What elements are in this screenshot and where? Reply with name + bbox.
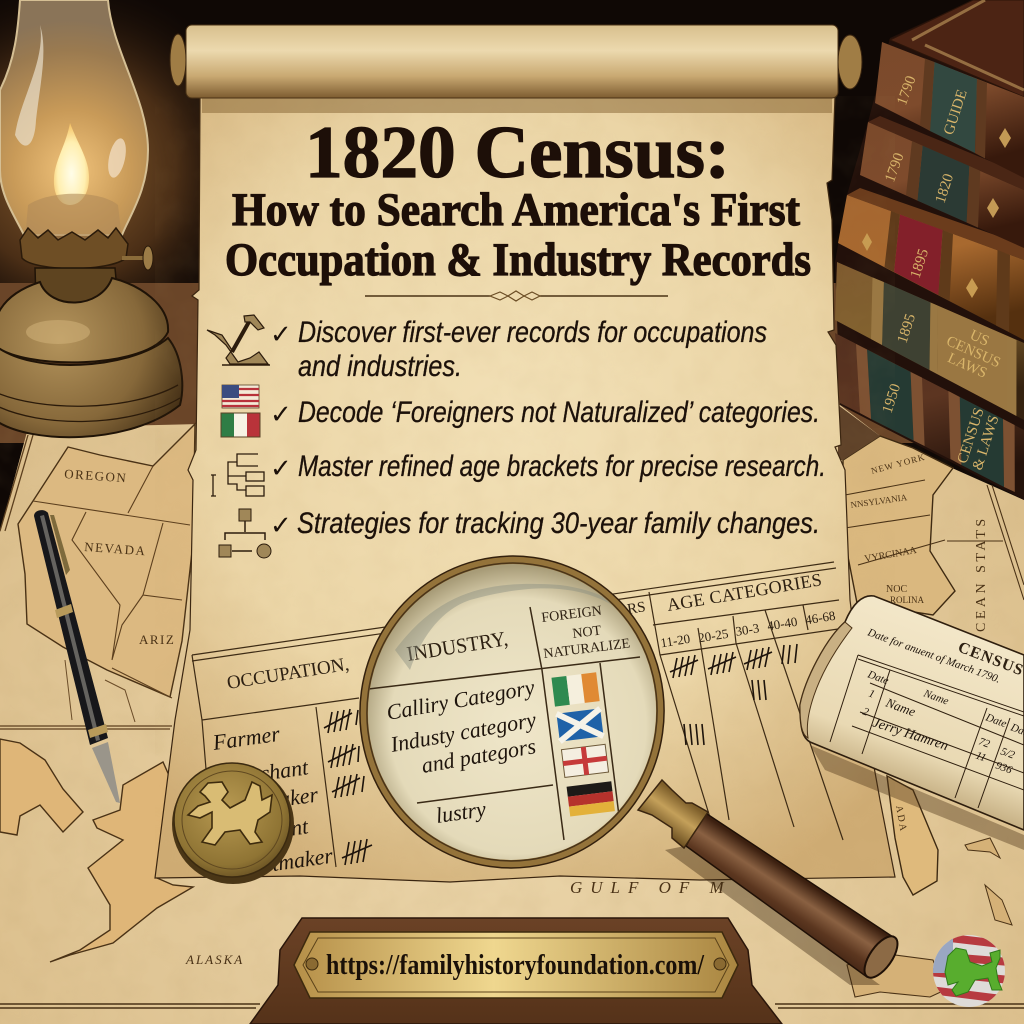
table header: occupation: OCCUPATION, <box>225 654 351 694</box>
map river lines <box>65 660 135 722</box>
bullet 2: Decode ‘Foreigners not Naturalized’ categories. <box>298 396 820 429</box>
map florida land <box>887 776 938 895</box>
map west states land <box>18 424 195 697</box>
map state borders <box>33 466 190 698</box>
map labels: ARIZ <box>139 632 175 647</box>
pen <box>34 510 120 803</box>
green lion emblem <box>945 948 1002 996</box>
lens handwriting: Industy category <box>388 707 538 757</box>
age column labels: 46-68 <box>804 608 836 627</box>
bullet 1: ✓ <box>270 320 292 350</box>
title line 1: 1820 Census: <box>305 112 730 194</box>
map labels: ROLINA <box>890 595 924 605</box>
rim outline <box>340 536 684 888</box>
title line 3: Occupation & Industry Records <box>225 234 811 286</box>
rim highlight <box>348 544 676 880</box>
map texture <box>0 428 1024 1024</box>
title divider ornament <box>365 291 668 301</box>
sheet entries: 936 <box>994 760 1014 777</box>
wick knob <box>122 246 153 270</box>
map bahama islands <box>965 838 1012 925</box>
occupation handwriting: Shoemaker <box>219 782 320 820</box>
book 5: 1950 <box>880 382 904 415</box>
occupation handwriting: Merchant <box>221 754 310 791</box>
spine title US Census Laws <box>938 320 1009 385</box>
lens handwriting: and pategors <box>420 733 538 778</box>
lens <box>347 543 677 881</box>
sheet entries: 5/2 <box>999 746 1017 762</box>
bullet 4: ✓ <box>270 511 292 541</box>
book 3 <box>838 188 1024 340</box>
lens handwriting: Calliry Category <box>385 674 537 725</box>
map horizontal border <box>0 726 172 729</box>
age column labels: 20-25 <box>697 626 729 645</box>
map caribbean land <box>847 953 945 997</box>
lens glare <box>395 584 628 670</box>
wax seal <box>172 763 294 884</box>
title line 2: How to Search America's First <box>232 184 800 236</box>
bullet 3: Master refined age brackets for precise research. <box>298 450 826 483</box>
sheet entries: Name <box>883 694 918 719</box>
magnifying glass <box>340 536 904 985</box>
scroll paper <box>155 96 895 882</box>
book 5 <box>835 333 1024 497</box>
book 2: 1790 <box>882 151 908 185</box>
sheet shadow <box>810 745 1024 850</box>
parchment scroll <box>155 25 895 882</box>
bullet 3: ✓ <box>270 454 292 484</box>
flag: Ireland <box>551 672 600 707</box>
flag: Scotland <box>556 708 604 742</box>
map labels: GULF OF M <box>570 878 732 897</box>
sheet lines <box>830 655 1024 808</box>
wooden table <box>0 283 1024 443</box>
lens foreigners heading: NATURALIZE <box>543 636 631 662</box>
map bottom border <box>0 1004 1024 1008</box>
title <box>225 112 811 286</box>
map alaska peninsula land <box>50 762 193 962</box>
map labels <box>64 452 989 967</box>
sheet entries: Date <box>983 711 1008 730</box>
gold tool marks <box>862 233 978 298</box>
map east state borders <box>845 480 945 565</box>
book 1: GUIDE <box>941 88 971 137</box>
lens contents <box>360 584 640 840</box>
spine title US Census Laws: LAWS <box>945 350 989 382</box>
icon: flow diagram <box>219 509 271 558</box>
gold tool mark <box>999 128 1011 148</box>
spine title US Census Laws: US <box>967 327 991 350</box>
roll end cap <box>800 622 852 738</box>
upper base highlight <box>26 320 90 344</box>
map labels: NEVADA <box>84 539 147 558</box>
bullet 1: Discover first-ever records for occupations <box>298 316 767 349</box>
spine title US Census Laws: CENSUS <box>944 333 1003 371</box>
sheet entries: Date <box>865 668 890 687</box>
right-hand book stack <box>835 0 1024 500</box>
sheet body <box>800 596 1024 830</box>
handle shadow <box>665 845 880 985</box>
flag: Germany <box>567 781 615 817</box>
handle end <box>858 931 904 983</box>
icon: plow and hammer <box>207 315 270 365</box>
brass plate <box>294 932 738 998</box>
table corner by east coast <box>838 405 880 460</box>
occupation handwriting: Bootmaker <box>235 843 335 881</box>
lamp burner crown <box>20 228 128 268</box>
rolled census sheet <box>800 596 1024 850</box>
map labels: NNSYLVANIA <box>850 492 908 510</box>
burner glow <box>25 194 122 240</box>
bullet 2: ✓ <box>270 400 292 430</box>
book 3: 1895 <box>908 247 932 280</box>
plate inner border <box>303 938 729 992</box>
map labels: NEW YORK <box>870 452 926 476</box>
florida label: ADA <box>893 805 909 834</box>
handle <box>686 812 894 977</box>
flag: England <box>561 744 609 777</box>
burner neck <box>35 268 118 314</box>
lens foreigners heading <box>541 606 630 658</box>
base ring lines <box>0 385 180 421</box>
book 2: 1820 <box>933 172 957 205</box>
age column labels: 40-40 <box>766 614 798 633</box>
lens foreigners heading: FOREIGN <box>541 604 603 626</box>
book 4: 1895 <box>895 312 919 345</box>
gold tool mark <box>987 198 999 218</box>
cover gold border <box>912 0 1024 90</box>
book 4 <box>835 262 1024 420</box>
book 5: & LAWS <box>970 413 1003 472</box>
book 2 <box>860 116 1024 248</box>
lamp chimney <box>0 0 148 235</box>
map labels: VYRCINAA <box>864 545 918 565</box>
sheet entries: Name <box>921 687 950 708</box>
map east border lines <box>947 485 1024 600</box>
sheet subtitle: Date for anuent of March 1790. <box>865 626 1002 686</box>
foundation logo <box>933 935 1005 1007</box>
dragon emblem <box>188 782 272 845</box>
stack backing <box>835 0 1024 500</box>
lamp light glow <box>0 0 270 290</box>
book 1: 1790 <box>894 74 920 108</box>
table header fragment: RS <box>626 599 647 618</box>
occupation handwriting: Farmer <box>210 721 282 755</box>
tally marks <box>324 644 797 865</box>
chimney highlight <box>105 137 129 179</box>
left screw <box>306 958 318 970</box>
occupation handwriting: Merchant <box>221 813 310 850</box>
sheet entries: Jerry Hamren <box>871 716 950 754</box>
age column labels <box>659 608 836 650</box>
right roller cap <box>838 35 862 89</box>
right screw <box>714 958 726 970</box>
lamp upper base <box>0 278 168 362</box>
age column labels: 30-3 <box>734 620 760 639</box>
website plaque <box>250 918 782 1024</box>
plaque wood base <box>250 918 782 1024</box>
left roller cap <box>170 34 186 86</box>
map alaska land <box>0 739 83 835</box>
map east coast land <box>843 436 955 615</box>
census table <box>192 562 845 881</box>
map labels: OREGON <box>64 466 128 485</box>
map labels: CEAN STATS <box>974 515 989 632</box>
table header: age categories: AGE CATEGORIES <box>665 569 824 615</box>
roller shadow <box>202 97 832 113</box>
bullet 4: Strategies for tracking 30-year family changes. <box>297 507 820 540</box>
icon: family tree <box>211 454 264 496</box>
lens handwriting: lustry <box>434 796 488 828</box>
age column labels: 11-20 <box>659 631 691 650</box>
bullet 1 <box>270 316 767 383</box>
magnifier rim <box>344 541 680 883</box>
lamp lower base <box>0 338 182 437</box>
occupation handwriting <box>210 721 335 881</box>
chimney reflection <box>15 25 43 146</box>
sheet entries: 1 <box>867 688 876 701</box>
sheet entries <box>861 668 1024 777</box>
website url: https://familyhistoryfoundation.com/ <box>326 950 705 981</box>
bullet list <box>207 315 826 558</box>
map labels: NOC <box>886 584 907 595</box>
flame <box>54 123 89 205</box>
lens heading: INDUSTRY, <box>405 626 510 666</box>
book cover top <box>890 0 1024 97</box>
lens foreigners heading: NOT <box>572 624 602 642</box>
icon: US flag <box>222 385 259 408</box>
sheet entries: 2 <box>861 706 871 719</box>
top roller <box>186 25 838 98</box>
sheet entries: 11 <box>974 750 988 764</box>
paper texture <box>155 96 895 878</box>
brass ferrule <box>638 780 708 848</box>
book 1 <box>875 42 1024 178</box>
book 5: CENSUS <box>955 406 988 466</box>
background map <box>0 405 1024 1024</box>
icon: Italian flag <box>221 413 260 437</box>
map labels: ALASKA <box>185 952 244 967</box>
oil lamp <box>0 0 182 437</box>
bullet 1: and industries. <box>298 350 462 383</box>
sheet entries: 72 <box>977 736 992 751</box>
lens handwriting <box>388 684 536 823</box>
map left border <box>0 435 33 531</box>
